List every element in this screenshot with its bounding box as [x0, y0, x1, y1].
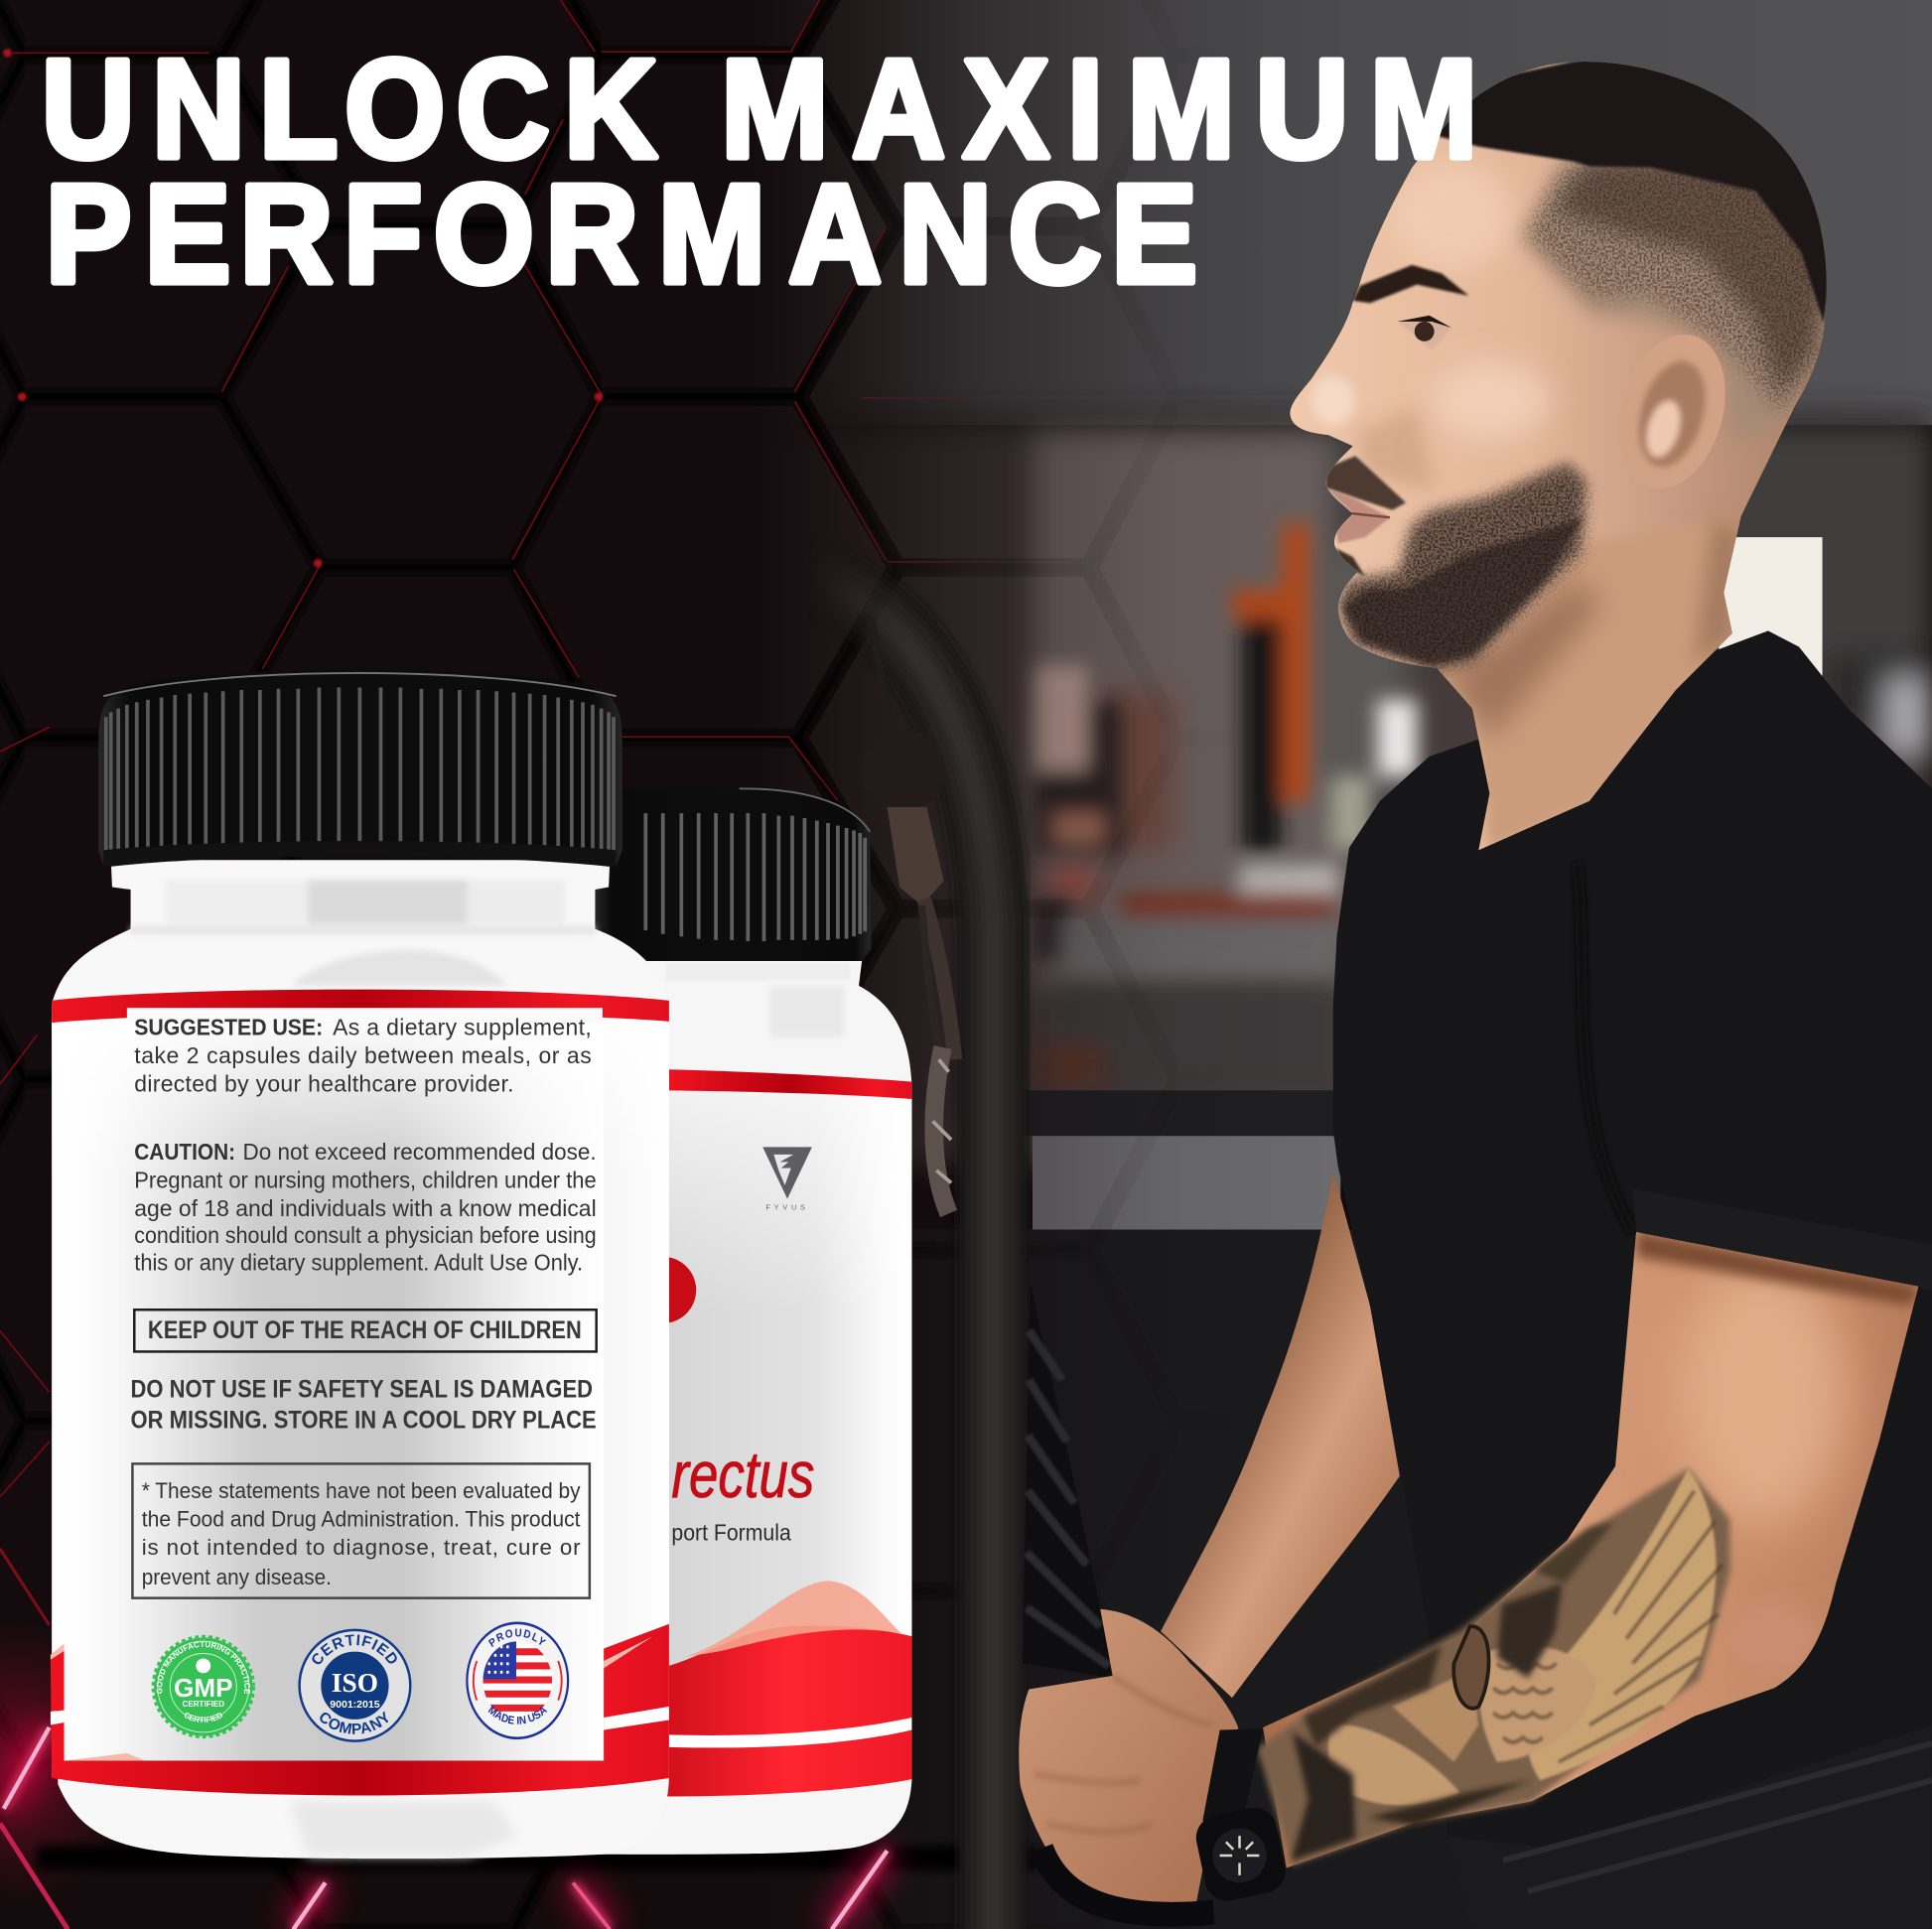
forehead and cheek highlights [1392, 160, 1516, 271]
product name: rectus [671, 1438, 814, 1511]
back bottle cap [595, 788, 871, 961]
title: UNLOCK MAXIMUM [42, 30, 1477, 187]
back bottle red band [669, 1069, 911, 1099]
top hair [1436, 60, 1834, 323]
red lower wave [51, 1023, 669, 1796]
hexagon pattern [0, 0, 1111, 1929]
FYVUS logo [762, 1147, 812, 1212]
caution text [134, 1139, 597, 1276]
safety seal warning: OR MISSING. STORE IN A COOL DRY PLACE [131, 1407, 597, 1434]
blurred gym backdrop [740, 0, 1932, 1929]
lips [1325, 487, 1390, 543]
sleeve hem [1632, 1189, 1932, 1292]
FDA disclaimer box: prevent any disease. [142, 1565, 332, 1589]
badge: ISO 9001: CERTIFIED [312, 1634, 397, 1664]
moustache [1325, 456, 1406, 510]
man: far arm [1161, 1171, 1400, 1698]
battle rope [1023, 1282, 1113, 1678]
badge: made in USA: MADE IN USA [488, 1706, 548, 1724]
badge: GMP certified [151, 1634, 255, 1739]
badge: ISO 9001: COMPANY [320, 1712, 389, 1734]
badge: made in USA: PROUDLY [488, 1628, 546, 1647]
tattoo: dark shading [1497, 1584, 1563, 1678]
keep out of reach box: KEEP OUT OF THE REACH OF CHILDREN [148, 1317, 582, 1344]
title [42, 30, 1477, 312]
front bottle [50, 672, 669, 1866]
suggested use text: As a dietary supplement, [333, 1014, 592, 1039]
rope curve under hand and waistband [1041, 1724, 1932, 1929]
man: torso shirt [1333, 630, 1932, 1849]
ear [1601, 322, 1742, 501]
tattoo: primary feathers [1527, 1468, 1717, 1780]
caution text: CAUTION: [134, 1139, 235, 1165]
back bottle [579, 788, 911, 1855]
bottle body [52, 860, 669, 1859]
tattoo wing [1257, 1468, 1729, 1865]
badge: ISO 9001: ISO [332, 1668, 378, 1698]
caution text: condition should consult a physician before using [134, 1222, 597, 1248]
eyebrow [1353, 265, 1468, 303]
neck shading [1417, 517, 1737, 850]
left fade into dark [369, 0, 1478, 1929]
bottle cap [98, 670, 622, 868]
gym post arc [807, 577, 993, 1929]
badge: GMP certified: CERTIFIED [183, 1700, 224, 1709]
suggested use text [134, 1014, 592, 1097]
FDA disclaimer box: the Food and Drug Administration. This product [142, 1507, 581, 1532]
FYVUS logo: FYVUS [765, 1203, 809, 1212]
shadow under brow and nose [1353, 407, 1436, 492]
suggested use text: directed by your healthcare provider. [134, 1071, 514, 1097]
caution text: this or any dietary supplement. Adult Use Only. [134, 1250, 583, 1276]
suggested use text: SUGGESTED USE: [134, 1014, 323, 1039]
man: gripping hand [1019, 1609, 1238, 1905]
base shading [290, 1801, 517, 1856]
man: head [1290, 60, 1834, 850]
back bottle red wave [665, 1581, 911, 1796]
back bottle body [579, 956, 911, 1855]
safety seal warning: DO NOT USE IF SAFETY SEAL IS DAMAGED [131, 1376, 593, 1403]
FDA disclaimer box: * These statements have not been evaluated by [142, 1478, 581, 1503]
hanging ball and chain [862, 622, 955, 1213]
FDA disclaimer box: is not intended to diagnose, treat, cure or [142, 1535, 581, 1560]
eye [1397, 316, 1451, 349]
tattoo: covert feathers [1479, 1645, 1596, 1762]
badge: ISO 9001 [298, 1628, 411, 1742]
neon glow bottom left [0, 1620, 142, 1903]
badge: GMP certified: GMP [174, 1673, 232, 1703]
safety seal warning [131, 1376, 597, 1434]
keep out of reach box [134, 1309, 597, 1351]
floor black band [37, 1846, 1035, 1870]
beard [1337, 462, 1586, 671]
caution text: Pregnant or nursing mothers, children under the [134, 1167, 597, 1192]
caution text: age of 18 and individuals with a know medical [134, 1195, 597, 1221]
suggested use text: take 2 capsules daily between meals, or as [134, 1042, 592, 1068]
neon hexagon lines [0, 1549, 888, 1929]
wristwatch [1192, 1728, 1290, 1905]
neck highlights [131, 880, 595, 986]
badge: GMP certified: GOOD MANUFACTURING PRACTICE [157, 1641, 250, 1694]
tattoo: forearm figure [1328, 1724, 1460, 1805]
faded hair [1520, 154, 1829, 444]
bottle label [52, 1013, 669, 1777]
red top band [52, 990, 669, 1023]
badge: GMP certified: CERTIFIED [185, 1713, 222, 1722]
badge: ISO 9001: 9001:2015 [330, 1699, 380, 1711]
title: PERFORMANCE [46, 155, 1197, 312]
red logo mark [629, 1257, 696, 1323]
badge: made in USA [466, 1622, 570, 1739]
product subtitle: port Formula [671, 1519, 791, 1545]
man: near arm with sleeve [1263, 1189, 1932, 1867]
caution text: Do not exceed recommended dose. [242, 1139, 597, 1165]
FDA disclaimer box [132, 1463, 590, 1598]
